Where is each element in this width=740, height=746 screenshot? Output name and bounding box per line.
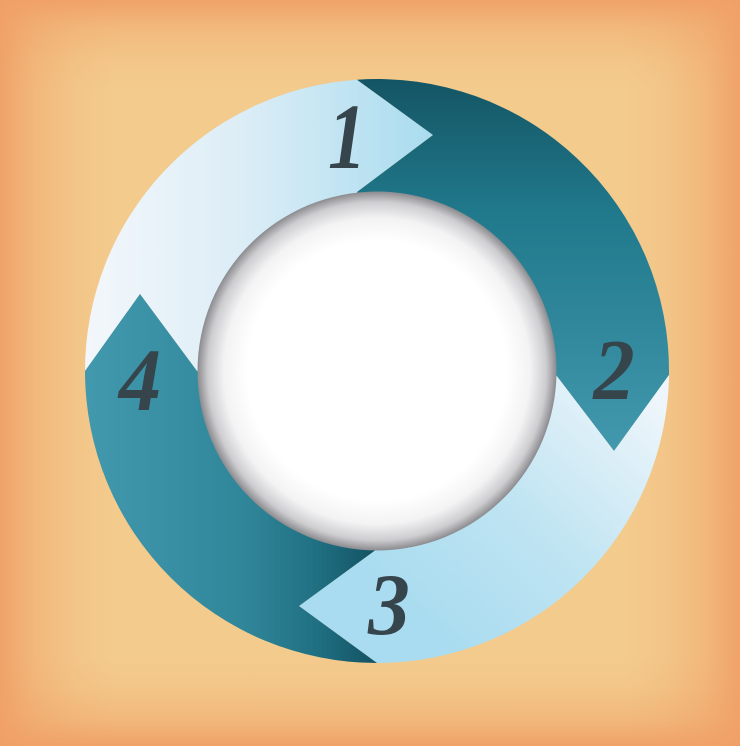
central circle (198, 192, 556, 550)
number 3: 3 (367, 556, 410, 653)
arrow 2 (357, 79, 669, 451)
arrow 3 (299, 375, 669, 663)
number 1: 1 (328, 86, 366, 189)
number 2: 2 (591, 322, 635, 418)
number 4: 4 (117, 331, 161, 429)
arrow 4 (85, 294, 377, 663)
arrow 1 (85, 80, 433, 371)
